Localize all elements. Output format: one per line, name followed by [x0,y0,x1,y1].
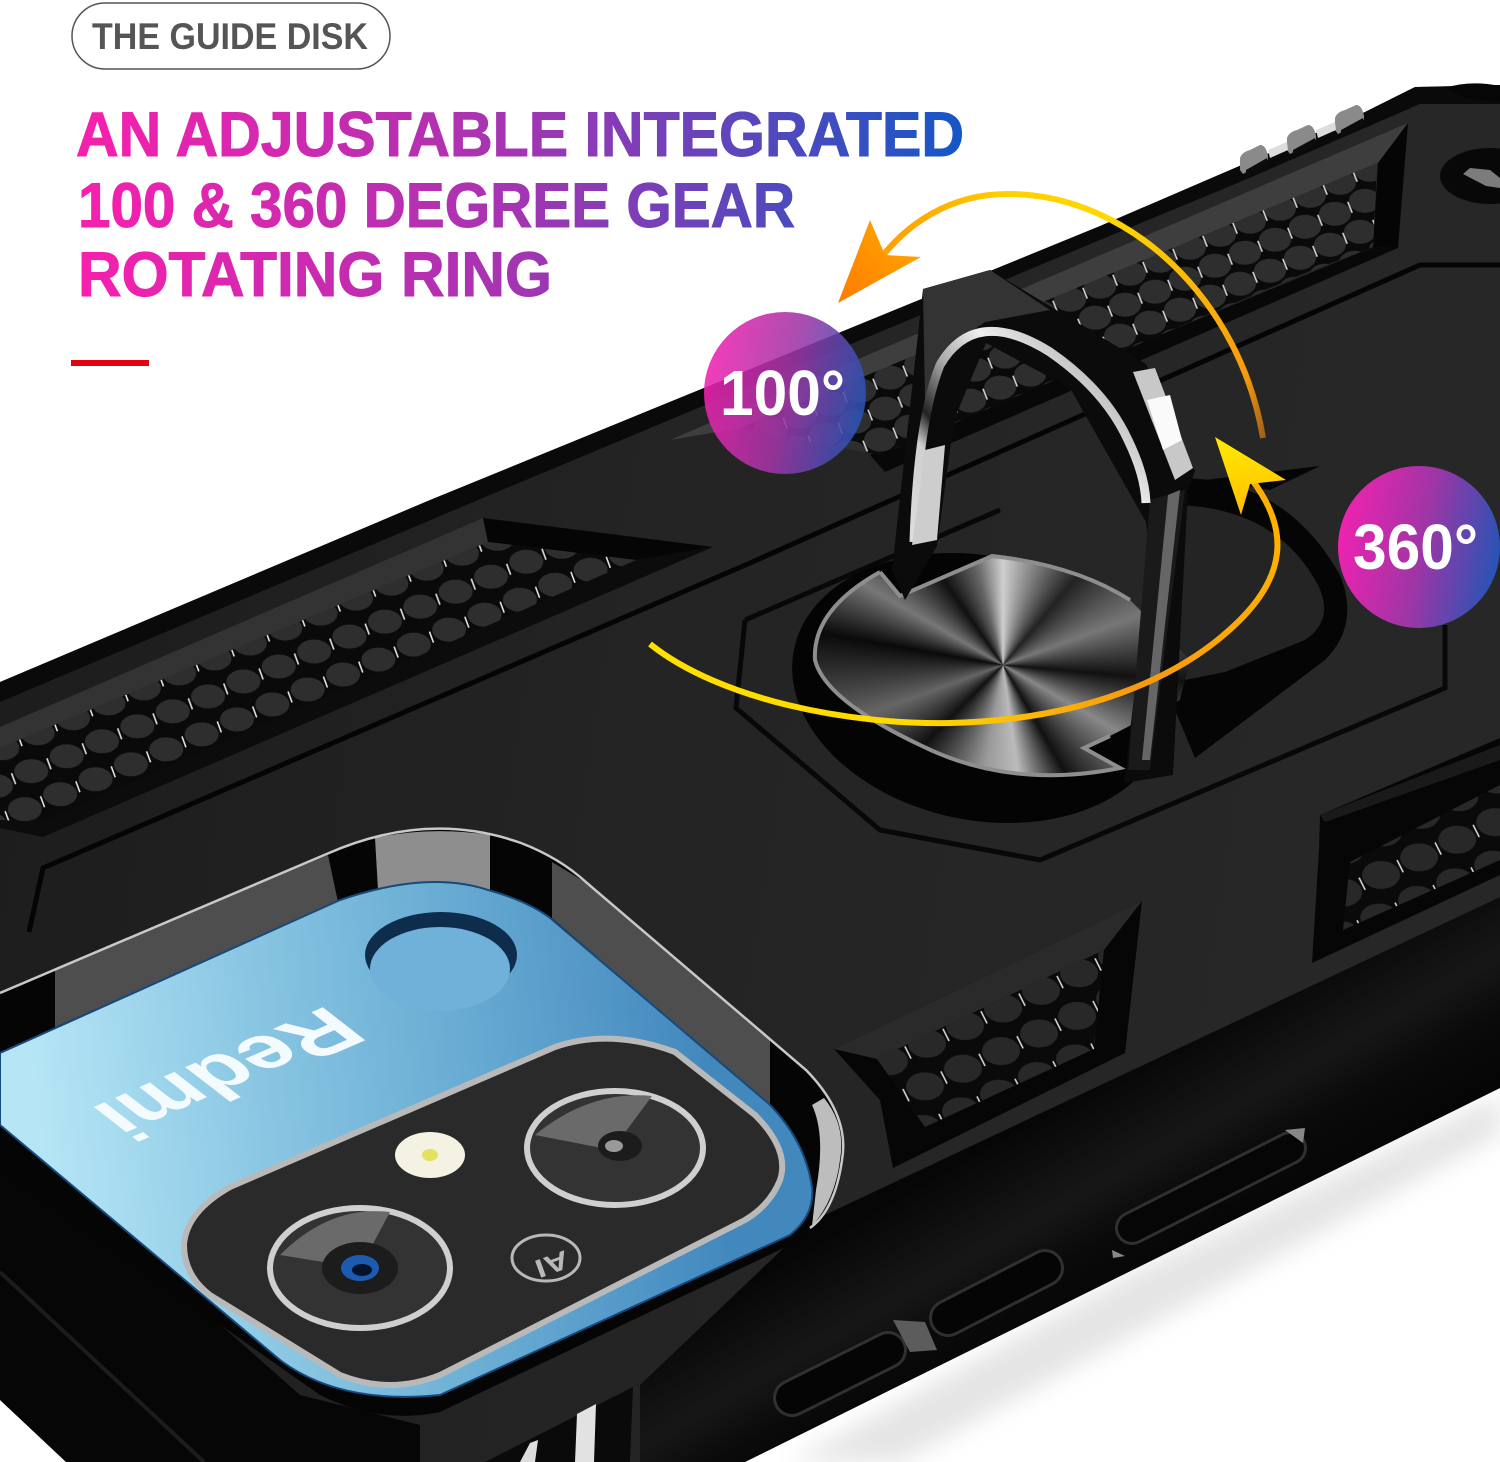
flash [395,1132,465,1178]
disc recess [767,519,1193,857]
textured strip: top right [670,123,1408,472]
metallic disc [817,558,1187,774]
silver side highlight [1133,368,1193,480]
bottom port stripes [485,1387,633,1462]
AI badge [512,1235,580,1284]
title: ROTATING RING [78,240,552,310]
Redmi logo: Redmi [75,994,383,1152]
octagon base [736,510,1445,860]
blue phone back [0,882,812,1397]
camera island [184,1039,782,1385]
silver arch highlight [914,331,1146,542]
badge: 100 degrees: 100° [720,357,845,429]
secondary lens [527,1091,703,1205]
arrow: 100 degree rotation [838,194,1263,438]
textured strip: right [1312,738,1500,963]
top edge buttons [1240,105,1365,178]
top right corner hole [1440,83,1500,204]
soft shadow under the phone [790,1095,1500,1462]
main lens [270,1208,450,1328]
section tag [72,3,390,69]
camera bezel [0,829,843,1416]
red accent line [71,360,149,366]
textured strip: lower center [834,901,1142,1168]
title: AN ADJUSTABLE INTEGRATED [76,100,964,170]
textured strip: left [0,518,713,837]
lens hole on phone back [365,912,517,1011]
circular recess right side [1150,478,1347,758]
badge: 360 degrees: 360° [1353,511,1478,583]
ring bail [892,270,1195,783]
AI badge: AI [531,1244,573,1284]
title [76,100,964,310]
ring holder [736,270,1445,860]
badge: 360 degrees [1338,466,1500,628]
section tag: THE GUIDE DISK [92,16,368,57]
silver leg highlight [912,445,945,545]
side buttons on the phone edge [792,1128,1305,1398]
title: 100 & 360 DEGREE GEAR [78,171,795,241]
arrow: 360 degree rotation [650,437,1286,723]
badge: 100 degrees [704,312,866,474]
